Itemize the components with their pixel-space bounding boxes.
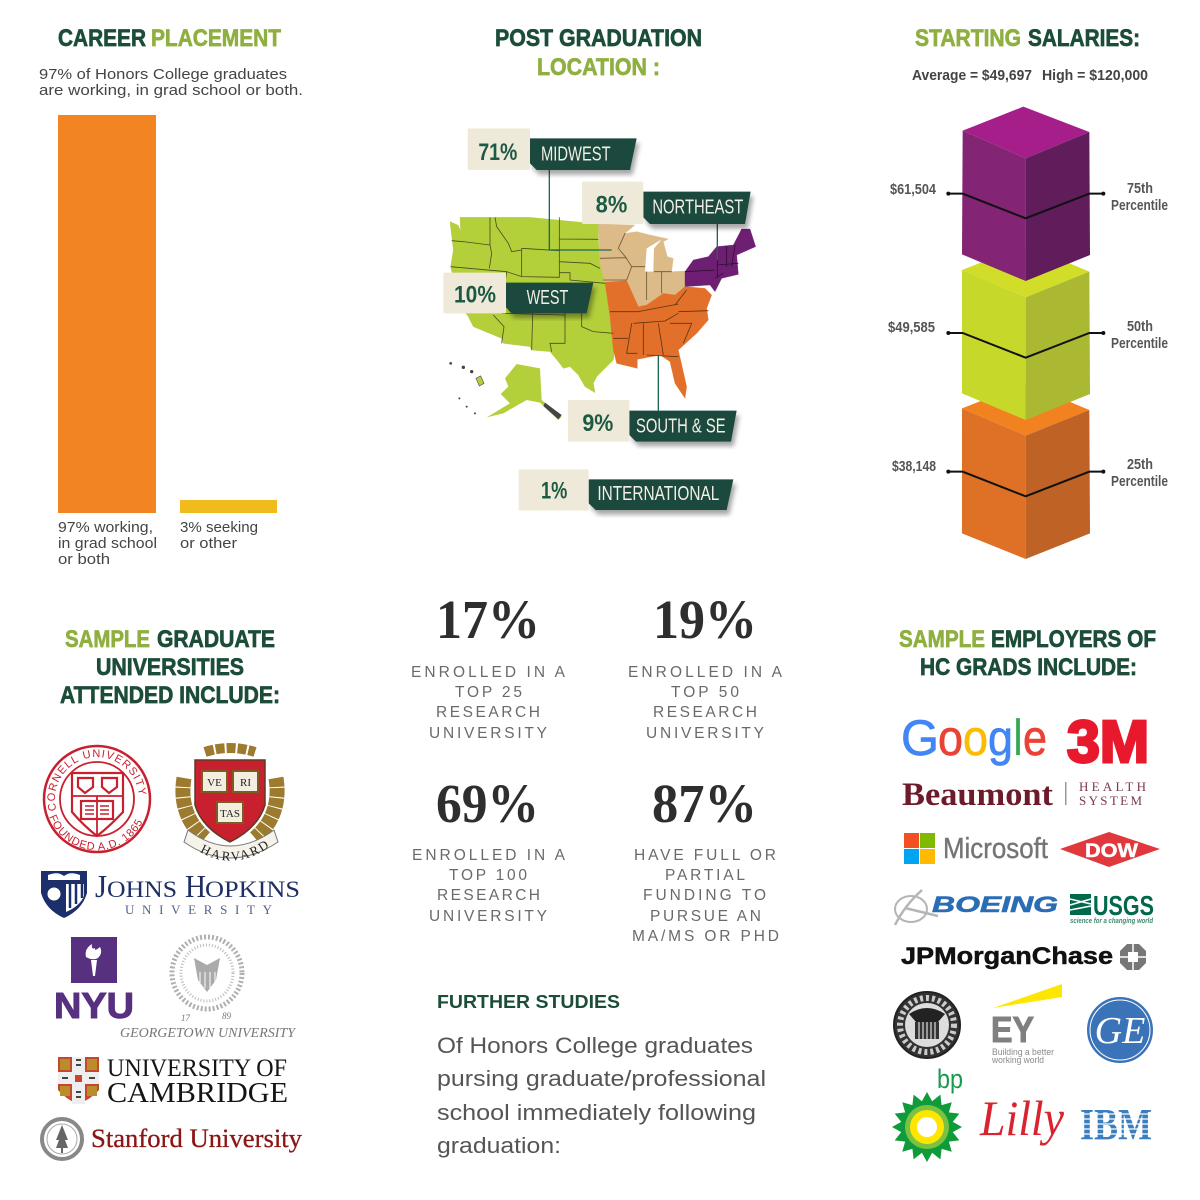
career placement intro text bbox=[39, 66, 303, 99]
statistic: 19% top 50 bbox=[628, 589, 783, 742]
logo: stanford university: Stanford University bbox=[91, 1124, 302, 1153]
logo: google bbox=[901, 710, 1047, 766]
callout: 10% west: 10% bbox=[454, 281, 496, 308]
salary summary line: Average = $49,697 bbox=[912, 68, 1032, 84]
bar label: 3%: 3% seeking bbox=[180, 519, 258, 536]
heading: post graduation location bbox=[495, 25, 702, 81]
logo: georgetown university bbox=[120, 937, 297, 1041]
career placement intro text: are working, in grad school or both. bbox=[39, 82, 303, 99]
logo: nyu bbox=[54, 937, 134, 1026]
logo: harvard: RI bbox=[240, 777, 251, 789]
logo: beaumont health system bbox=[902, 777, 1146, 813]
statistic: 87% funding: 87% bbox=[652, 773, 757, 834]
logo: johns hopkins university: J bbox=[95, 868, 107, 904]
further studies paragraph bbox=[437, 1033, 766, 1158]
logo: beaumont health system: HEALTH bbox=[1079, 779, 1146, 794]
logo: johns hopkins university: UNIVERSITY bbox=[125, 902, 273, 917]
logo: beaumont health system: SYSTEM bbox=[1079, 793, 1142, 808]
salary labels: Percentile bbox=[1111, 198, 1168, 214]
bar: 3% seeking bbox=[180, 500, 277, 513]
bar label: 97% bbox=[58, 519, 157, 568]
US map with region callouts bbox=[443, 128, 756, 511]
heading: sample graduate universities: SAMPLE bbox=[65, 626, 150, 653]
logo: cornell university bbox=[42, 744, 152, 854]
bar chart: career placement bbox=[58, 115, 277, 568]
heading: post graduation location: POST GRADUATION bbox=[495, 25, 702, 52]
heading: starting salaries: STARTING bbox=[915, 25, 1021, 52]
salary labels: 75th bbox=[1127, 181, 1153, 197]
cube: 25th percentile bbox=[962, 383, 1090, 559]
heading: further studies: FURTHER STUDIES bbox=[437, 992, 620, 1012]
salary labels: 50th bbox=[1127, 319, 1153, 335]
logo: 3m: 3M bbox=[1067, 709, 1149, 775]
logo: google: o bbox=[938, 710, 963, 766]
logo: microsoft bbox=[904, 833, 1048, 865]
statistic: 17% top 25: RESEARCH bbox=[436, 704, 540, 721]
map region: midwest bbox=[598, 224, 685, 307]
callout: 71% midwest bbox=[468, 128, 637, 170]
heading: starting salaries: SALARIES: bbox=[1028, 25, 1140, 52]
logo: harvard: TAS bbox=[220, 808, 240, 820]
callout: 1% international: INTERNATIONAL bbox=[597, 483, 719, 505]
heading: sample graduate universities: ATTENDED INCLUDE: bbox=[60, 682, 280, 709]
salary labels bbox=[888, 181, 1168, 490]
logo: federal reserve seal bbox=[894, 992, 960, 1058]
heading: sample graduate universities: GRADUATE bbox=[157, 626, 275, 653]
bar label: 97%: in grad school bbox=[58, 535, 157, 552]
statistic: 69% top 100: RESEARCH bbox=[437, 887, 540, 904]
logo: georgetown university: GEORGETOWN UNIVERSITY bbox=[120, 1026, 297, 1041]
logo: johns hopkins university: OHNS bbox=[107, 877, 177, 902]
salary summary line bbox=[912, 68, 1148, 84]
logo: johns hopkins university: H bbox=[185, 868, 206, 904]
statistic: 87% funding: FUNDING TO bbox=[643, 887, 766, 904]
hawaii and aleutians bbox=[476, 376, 484, 386]
logo: johns hopkins university: OPKINS bbox=[205, 877, 300, 902]
bar label: 97%: 97% working, bbox=[58, 519, 153, 536]
statistic: 69% top 100: TOP 100 bbox=[449, 867, 527, 884]
connector lines bbox=[549, 170, 717, 411]
further studies paragraph: pursing graduate/professional bbox=[437, 1066, 766, 1091]
callout: 9% south and southeast bbox=[568, 400, 737, 442]
further studies paragraph: graduation: bbox=[437, 1133, 561, 1158]
logo: boeing: BOEING bbox=[932, 892, 1058, 917]
salary labels: $49,585 bbox=[888, 320, 935, 336]
statistic: 69% top 100: UNIVERSITY bbox=[429, 908, 547, 925]
logo: boeing bbox=[895, 890, 1058, 925]
logo: ey: working world bbox=[991, 1055, 1044, 1065]
heading: sample employers: HC GRADS INCLUDE: bbox=[920, 654, 1137, 681]
statistic: 87% funding: PURSUE AN bbox=[650, 908, 761, 925]
logo: google: G bbox=[901, 710, 939, 766]
heading: sample graduate universities bbox=[60, 626, 280, 709]
heading: career placement: CAREER bbox=[58, 25, 146, 52]
salary labels: Percentile bbox=[1111, 474, 1168, 490]
further studies paragraph: school immediately following bbox=[437, 1100, 756, 1125]
heading: sample graduate universities: UNIVERSITIES bbox=[96, 654, 244, 681]
logo: harvard: HARVARD bbox=[200, 842, 268, 861]
logo: harvard bbox=[175, 743, 285, 861]
salary labels: Percentile bbox=[1111, 336, 1168, 352]
logo: harvard: VE bbox=[207, 777, 222, 789]
cube: 50th percentile bbox=[962, 245, 1090, 420]
logo: lilly: Lilly bbox=[979, 1090, 1065, 1146]
logo: bp bbox=[891, 1064, 963, 1163]
statistic: 17% top 25: UNIVERSITY bbox=[429, 725, 547, 742]
logo: dow bbox=[1060, 832, 1160, 867]
callout: 9% south and southeast: 9% bbox=[582, 410, 613, 437]
logo: usgs: USGS bbox=[1093, 890, 1154, 921]
logo: stanford university bbox=[42, 1119, 302, 1159]
logo: microsoft: Microsoft bbox=[943, 833, 1048, 865]
bar label: 3% bbox=[180, 519, 258, 552]
logo: google: g bbox=[988, 710, 1013, 766]
bar label: 97%: or both bbox=[58, 551, 110, 568]
logo: ey bbox=[991, 984, 1062, 1065]
callout: 1% international bbox=[519, 469, 733, 511]
logo: ge bbox=[1088, 998, 1152, 1062]
heading: sample employers bbox=[899, 626, 1156, 681]
logo: beaumont health system: Beaumont bbox=[902, 777, 1053, 813]
statistic: 69% top 100 bbox=[412, 773, 566, 925]
map region: south and southeast bbox=[605, 281, 712, 398]
callout: 71% midwest: MIDWEST bbox=[541, 144, 611, 166]
logo: google: e bbox=[1023, 710, 1047, 766]
further studies paragraph: Of Honors College graduates bbox=[437, 1033, 753, 1058]
salary summary line: High = $120,000 bbox=[1042, 68, 1148, 84]
cube: 75th percentile bbox=[962, 107, 1090, 281]
map region: northeast bbox=[685, 229, 756, 292]
logo: cornell university: CORNELL UNIVERSITY bbox=[47, 750, 146, 811]
statistic: 17% top 25: TOP 25 bbox=[455, 684, 522, 701]
heading: starting salaries bbox=[915, 25, 1140, 52]
logo: usgs bbox=[1070, 890, 1154, 925]
salary labels: $61,504 bbox=[890, 182, 936, 198]
callout: 71% midwest: 71% bbox=[478, 139, 517, 166]
career placement intro text: 97% of Honors College graduates bbox=[39, 66, 287, 83]
logo: ibm: IBM bbox=[1080, 1100, 1152, 1149]
logo: google: o bbox=[963, 710, 988, 766]
logo: usgs: science for a changing world bbox=[1070, 918, 1154, 925]
statistic: 87% funding: PARTIAL bbox=[665, 867, 745, 884]
heading: career placement bbox=[58, 25, 281, 52]
logo: georgetown university: 89 bbox=[222, 1011, 232, 1021]
callout: 10% west: WEST bbox=[527, 287, 568, 309]
bar label: 3%: or other bbox=[180, 535, 237, 552]
heading: sample employers: SAMPLE bbox=[899, 626, 985, 653]
logo: johns hopkins university bbox=[41, 868, 300, 918]
logo: university of cambridge bbox=[58, 1055, 288, 1109]
logo: university of cambridge: CAMBRIDGE bbox=[107, 1077, 288, 1109]
statistic: 17% top 25: 17% bbox=[436, 589, 540, 650]
map region: west bbox=[450, 217, 615, 393]
statistic: 19% top 50: UNIVERSITY bbox=[646, 725, 764, 742]
callout: 8% northeast: NORTHEAST bbox=[652, 197, 743, 219]
callout: 8% northeast bbox=[582, 182, 751, 224]
statistic: 19% top 50: 19% bbox=[653, 589, 757, 650]
heading: post graduation location: LOCATION : bbox=[537, 54, 660, 81]
heading: sample employers: EMPLOYERS OF bbox=[991, 626, 1156, 653]
logo: google: l bbox=[1014, 710, 1022, 766]
logo: dow: DOW bbox=[1085, 841, 1138, 862]
logo: nyu: NYU bbox=[54, 985, 134, 1026]
logo: ey: Building a better bbox=[992, 1047, 1054, 1057]
statistic: 19% top 50: RESEARCH bbox=[653, 704, 757, 721]
logo: ey: EY bbox=[991, 1009, 1034, 1050]
marker lines bbox=[948, 194, 1103, 496]
callout: 9% south and southeast: SOUTH & SE bbox=[636, 415, 726, 437]
statistic: 87% funding: MA/MS OR PHD bbox=[632, 928, 779, 945]
statistic: 87% funding bbox=[632, 773, 779, 945]
callout: 10% west bbox=[443, 273, 593, 313]
stacked salary cubes bbox=[946, 107, 1105, 559]
logo: jpmorgan chase: JPMorganChase bbox=[901, 943, 1113, 970]
statistic: 17% top 25 bbox=[411, 589, 566, 742]
logo: university of cambridge: UNIVERSITY OF bbox=[107, 1055, 287, 1082]
salary labels: 25th bbox=[1127, 457, 1153, 473]
logo: georgetown university: 17 bbox=[181, 1013, 190, 1023]
statistic: 69% top 100: ENROLLED IN A bbox=[412, 847, 566, 864]
statistic: 19% top 50: TOP 50 bbox=[671, 684, 739, 701]
logo: ge: GE bbox=[1095, 1010, 1145, 1052]
bar: 97% working bbox=[58, 115, 156, 513]
callout: 8% northeast: 8% bbox=[596, 191, 627, 218]
statistic: 19% top 50: ENROLLED IN A bbox=[628, 664, 783, 681]
callout: 1% international: 1% bbox=[541, 477, 567, 504]
logo: bp: bp bbox=[937, 1064, 963, 1094]
heading: career placement: PLACEMENT bbox=[151, 25, 281, 52]
statistic: 87% funding: HAVE FULL OR bbox=[634, 847, 776, 864]
salary labels: $38,148 bbox=[892, 459, 936, 475]
alaska bbox=[487, 364, 562, 420]
lake michigan bbox=[645, 239, 662, 272]
statistic: 69% top 100: 69% bbox=[436, 773, 539, 834]
logo: cornell university: FOUNDED A.D. 1865 bbox=[49, 814, 142, 850]
statistic: 17% top 25: ENROLLED IN A bbox=[411, 664, 566, 681]
